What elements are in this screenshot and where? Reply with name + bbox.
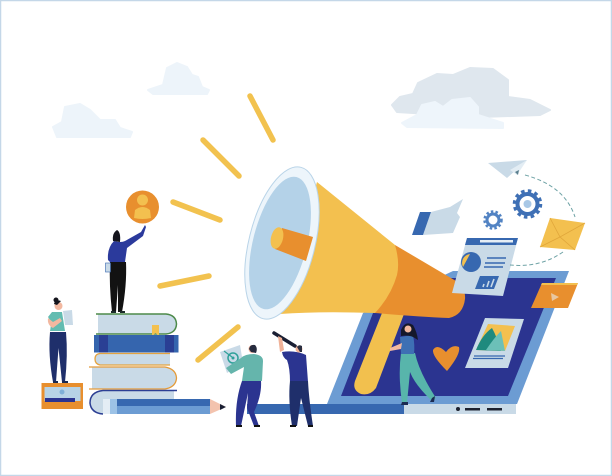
sound rays — [160, 96, 273, 360]
woman holding megaphone — [390, 323, 436, 405]
icon: large gear — [514, 191, 540, 217]
man with telescope — [274, 333, 313, 427]
cloud: small right — [402, 98, 503, 128]
cloud: top — [148, 63, 209, 94]
stack of books — [89, 314, 178, 414]
icon: small gear — [484, 212, 502, 228]
icon: envelope — [540, 218, 585, 250]
video card — [531, 283, 578, 308]
icon: paper plane — [488, 160, 527, 178]
cloud: large right — [392, 68, 550, 117]
woman on books — [106, 225, 146, 313]
megaphone — [231, 159, 465, 394]
icon: user badge — [126, 190, 159, 224]
pencil — [103, 399, 226, 414]
book: thin orange — [95, 354, 170, 365]
icon: heart — [433, 346, 459, 371]
dashed flight path — [510, 175, 575, 265]
laptop — [247, 271, 569, 414]
cloud: left — [53, 104, 132, 137]
dashboard document — [452, 238, 518, 296]
icon: like thumb — [412, 199, 463, 235]
man with target sheet — [220, 345, 263, 427]
book: large orange — [89, 367, 176, 389]
book: bottom blue — [90, 390, 177, 414]
woman with tablet — [42, 298, 83, 409]
book: blue spine — [94, 335, 178, 352]
book: green cover — [96, 314, 176, 336]
image card — [465, 318, 524, 368]
